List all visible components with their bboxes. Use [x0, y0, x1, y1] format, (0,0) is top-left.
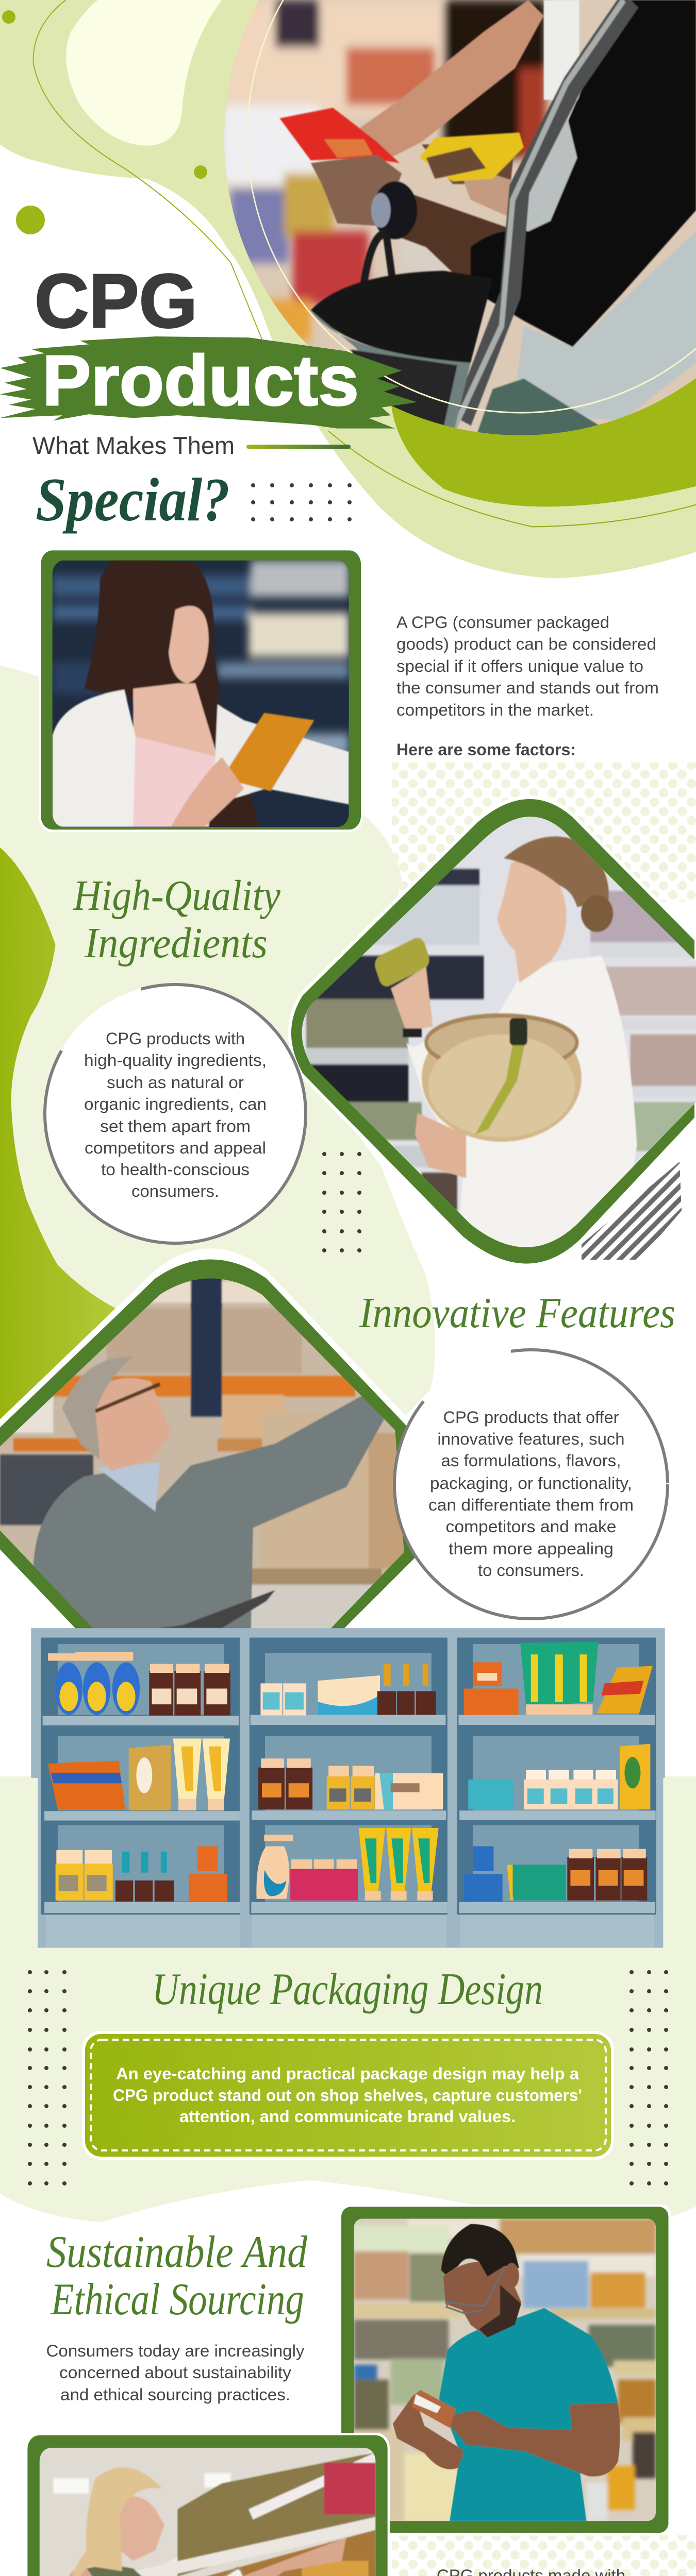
photo frame — [39, 548, 363, 832]
callout: unique packaging design: attention, and communicate brand values. — [179, 2107, 516, 2126]
intro text block: A CPG (consumer packaged — [396, 613, 609, 632]
products: top row — [48, 1642, 653, 1716]
intro text block: special if it offers unique value to — [396, 657, 643, 675]
dot grid: title — [251, 483, 352, 521]
callout: innovative features: competitors and make — [445, 1517, 617, 1536]
intro text block: goods) product can be considered — [396, 635, 656, 653]
heading: Sustainable And Ethical Sourcing: Sustainable And — [46, 2227, 308, 2277]
subtitle rule — [246, 445, 351, 449]
panel: intro photo of woman reading box — [39, 548, 363, 832]
title line: Products: Products — [42, 341, 359, 420]
stripes accent — [582, 1162, 682, 1260]
photo frame — [339, 2204, 671, 2535]
halftone dots: lower right — [392, 2535, 696, 2576]
callout: innovative features: innovative features, such — [437, 1430, 625, 1448]
callout: innovative features: can differentiate them from — [428, 1496, 634, 1514]
callout: innovative features: packaging, or functionality, — [430, 1474, 632, 1493]
factors lead-in: Here are some factors: — [396, 740, 576, 759]
callout: high-quality ingredients: such as natural or — [107, 1073, 244, 1092]
script word: Special: Special? — [36, 465, 230, 534]
halftone dots: upper right — [392, 762, 696, 902]
title — [32, 259, 359, 534]
heading: Sustainable And Ethical Sourcing — [46, 2227, 308, 2325]
text block: sustainability intro — [46, 2342, 304, 2404]
callout: high-quality ingredients: set them apart from — [100, 1117, 251, 1136]
dot grid: middle — [322, 1152, 361, 1252]
photo: shopper holding snack packs in basket — [213, 0, 696, 452]
dot grid: packaging right — [629, 1970, 668, 2185]
heading: Sustainable And Ethical Sourcing: Ethical Sourcing — [50, 2275, 304, 2325]
callout: innovative features: CPG products that offer — [443, 1408, 619, 1427]
background: pale green packaging section — [0, 1776, 696, 2227]
shelf unit — [31, 1628, 665, 1778]
intro text block: the consumer and stands out from — [396, 679, 659, 697]
illustration: product shelves — [31, 1628, 665, 1948]
diamond frame — [0, 1248, 426, 1636]
products: bottom row — [56, 1828, 647, 1902]
text block: sustainability intro: concerned about sustainability — [59, 2363, 291, 2382]
brush stroke behind title — [0, 336, 417, 429]
photo frame — [25, 2433, 390, 2576]
callout: high-quality ingredients: consumers. — [131, 1182, 219, 1200]
panel: photo of man in teal shirt — [339, 2204, 671, 2535]
decorative green dots — [2, 10, 207, 234]
heading: Innovative Features: Innovative Features — [359, 1289, 675, 1337]
subtitle: What Makes Them — [32, 432, 235, 459]
callout: unique packaging design: CPG product stand out on shop shelves, capture customers' — [113, 2086, 582, 2105]
callout: unique packaging design: An eye-catching and practical package design may help a — [116, 2064, 579, 2083]
heading: High-Quality Ingredients — [73, 872, 281, 967]
callout: high-quality ingredients: competitors and appeal — [85, 1139, 266, 1157]
panel: diamond photo of man in warehouse — [0, 1248, 426, 1636]
heading: High-Quality Ingredients: High-Quality — [73, 872, 281, 920]
panel: diamond photo of woman with basket — [289, 797, 696, 1276]
green panel — [84, 2032, 612, 2158]
callout: high-quality ingredients: to health-conscious — [101, 1160, 250, 1179]
callout: high-quality ingredients — [44, 984, 306, 1244]
background: top light green wave — [0, 0, 696, 578]
callout: innovative features: to consumers. — [478, 1561, 584, 1580]
dot grid: packaging left — [28, 1970, 67, 2185]
callout: high-quality ingredients: organic ingredients, can — [84, 1095, 267, 1113]
products: middle row — [48, 1738, 650, 1810]
callout: innovative features: as formulations, flavors, — [441, 1451, 621, 1470]
heading: High-Quality Ingredients: Ingredients — [84, 919, 268, 967]
intro text block — [396, 613, 659, 759]
diamond frame — [290, 797, 696, 1265]
callout: innovative features — [394, 1349, 668, 1619]
hero thin circle line — [247, 0, 696, 413]
text block: sustainability intro: Consumers today are increasingly — [46, 2342, 304, 2360]
sketch circle — [394, 1349, 668, 1619]
intro text block: competitors in the market. — [396, 701, 594, 719]
band: green swoosh under hero — [391, 342, 696, 506]
panel: photo of blonde woman at shelf — [25, 2433, 390, 2576]
callout: innovative features: them more appealing — [449, 1539, 614, 1558]
callout: high-quality ingredients: high-quality ingredients, — [84, 1051, 267, 1070]
text block: sustainability intro: and ethical sourcing practices. — [60, 2385, 290, 2404]
callout: unique packaging design — [84, 2032, 612, 2158]
sketch circle — [44, 984, 306, 1244]
background: pale green section — [0, 665, 435, 1449]
heading: Unique Packaging Design: Unique Packaging Design — [152, 1964, 543, 2014]
title line: CPG: CPG — [35, 259, 197, 344]
callout: high-quality ingredients: CPG products with — [106, 1029, 245, 1048]
